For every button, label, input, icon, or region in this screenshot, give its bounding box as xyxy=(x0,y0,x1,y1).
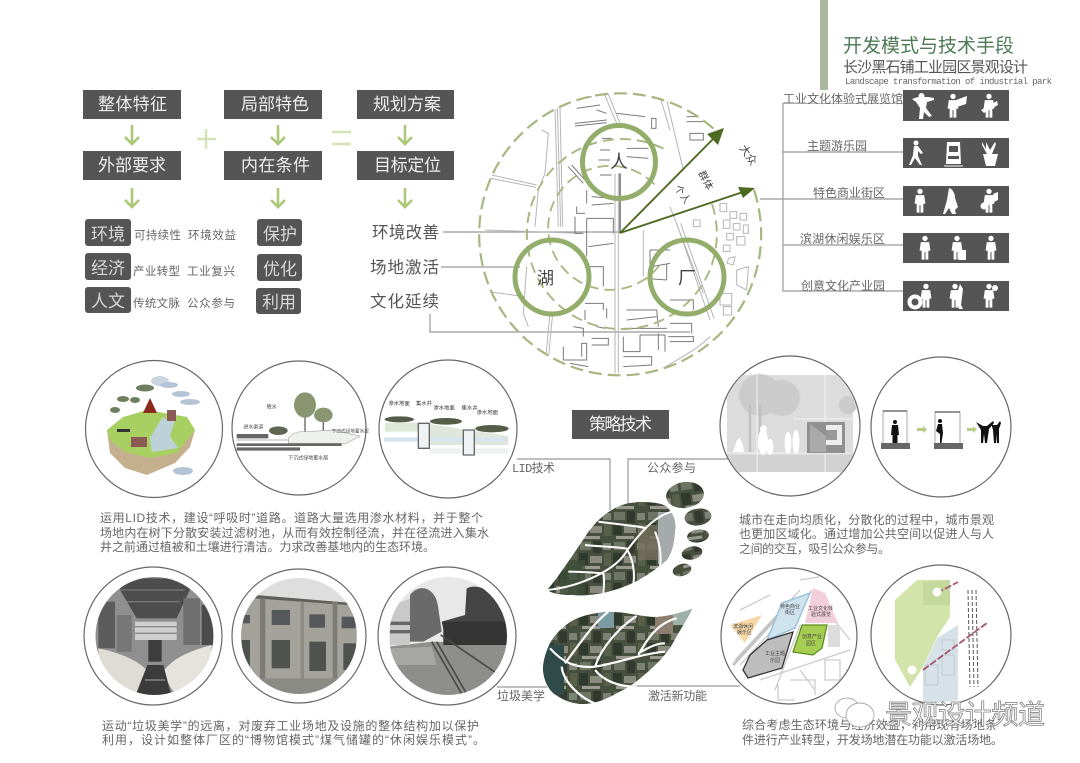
connector labels: 公众参与 xyxy=(647,460,696,475)
plus sign xyxy=(197,129,216,149)
flow column: plan: 规划方案 xyxy=(373,95,441,114)
strategy heading xyxy=(572,410,669,439)
body text: waste aesthetics: 利用，设计如整体厂区的“博物馆模式”煤气储罐的“休闲娱乐模式”。 xyxy=(102,732,485,747)
body text: public participation: 之间的交互，吸引公众参与。 xyxy=(739,541,890,556)
frame one xyxy=(881,411,910,449)
goals list: 文化延续 xyxy=(370,292,439,311)
condition tags xyxy=(256,219,302,314)
circle: activation plan xyxy=(871,565,1011,705)
cheering figures xyxy=(976,421,1001,443)
arrows xyxy=(620,128,755,233)
requirement tags: 产业转型 xyxy=(133,264,180,278)
flow column: overall xyxy=(83,90,181,207)
green top xyxy=(107,410,195,458)
flow column: plan: 目标定位 xyxy=(374,156,441,175)
labels: 集水井 xyxy=(416,399,433,407)
body text: LID: 井之前通过植被和土壤进行清洁。力求改善基地内的生态环境。 xyxy=(100,539,435,554)
circle: factory: 厂 xyxy=(678,268,696,288)
body text: LID xyxy=(100,510,489,554)
requirement tags: 公众参与 xyxy=(187,296,235,310)
requirement tags: 工业复兴 xyxy=(187,265,235,278)
wells xyxy=(418,423,474,455)
condition tags: 保护 xyxy=(263,225,297,244)
connector labels: LID技术 xyxy=(512,461,555,476)
flow column: overall: 整体特征 xyxy=(98,95,167,114)
zone labels: 娱乐区 xyxy=(737,629,752,636)
title block: 长沙黑石铺工业园区景观设计 xyxy=(843,59,1028,76)
circle: lake: 湖 xyxy=(537,269,554,288)
circle: LID eco island xyxy=(86,360,222,498)
foot-shaped leaf xyxy=(540,479,713,600)
lower leaf xyxy=(543,609,692,704)
requirement tags: 环境 xyxy=(91,225,125,244)
circle: permeable section xyxy=(379,360,517,498)
body text: public participation: 城市在走向均质化，分散化的过程中，城市景观 xyxy=(739,512,994,527)
annotations xyxy=(243,403,369,461)
labels xyxy=(388,399,499,416)
zone labels: 乐园 xyxy=(770,657,780,664)
zone labels: 工业文化体 xyxy=(808,605,833,612)
annotations: 进水渠道 xyxy=(243,423,263,430)
requirement tags: 可持续性 xyxy=(134,228,181,242)
body text: public participation: 也更加区域化。通过增加公共空间以促进人与人 xyxy=(739,527,994,541)
photo circle: plant interior xyxy=(84,567,222,705)
zone labels xyxy=(733,603,833,664)
zone labels: 创意产业 xyxy=(802,633,822,640)
labels: 渗水地面 xyxy=(433,403,455,411)
circle: road section xyxy=(232,361,369,495)
program labels: 特色商业街区 xyxy=(813,185,885,200)
trees xyxy=(269,392,333,435)
watermark: 景观设计频道 xyxy=(885,700,1045,730)
goals list: 环境改善 xyxy=(372,223,439,242)
circle: lake xyxy=(515,240,589,314)
photo circle: old building xyxy=(232,569,366,703)
green arrow two xyxy=(967,426,977,433)
brick blocks xyxy=(131,410,176,447)
body text: new functions: 综合考虑生态环境与经济效益，利用现有场地条 xyxy=(742,717,997,732)
goals list: 场地激活 xyxy=(370,258,439,277)
body text: new functions: 件进行产业转型，开发场地潜在功能以激活场地。 xyxy=(742,732,1003,747)
equals sign xyxy=(332,132,351,144)
circle: factory xyxy=(650,240,724,314)
annotations: 降水 xyxy=(267,403,277,410)
circle: interaction diagram xyxy=(871,357,1011,497)
circle: public space scene xyxy=(720,356,860,496)
body text: public participation xyxy=(739,512,994,556)
wechat bubbles xyxy=(835,698,874,727)
soil block xyxy=(107,430,195,475)
direction labels: 大众 xyxy=(737,142,761,168)
zone polygons xyxy=(767,593,810,640)
dashed rings xyxy=(479,93,761,375)
map linework xyxy=(485,92,748,373)
circle: people: 人 xyxy=(610,152,628,172)
body text: waste aesthetics xyxy=(102,718,485,747)
connector labels: 激活新功能 xyxy=(648,688,707,703)
annotations: 下沉式绿地蓄水层 xyxy=(288,454,328,461)
icon strip 3 xyxy=(903,186,1009,216)
frame two xyxy=(934,412,963,449)
title block: 开发模式与技术手段 xyxy=(843,35,1014,57)
zone labels: 街区 xyxy=(785,609,795,616)
flow column: local: 内在条件 xyxy=(241,156,310,175)
flow column: local xyxy=(224,90,322,207)
body text: LID: 运用LID技术，建设“呼吸时”道路。道路大量选用渗水材料，并于整个 xyxy=(100,510,483,525)
labels: 集水井 xyxy=(462,403,478,411)
body text: waste aesthetics: 运动“垃圾美学”的远离，对废弃工业场地及设施的整体结构加以保护 xyxy=(102,718,479,733)
toes xyxy=(664,479,713,578)
icon strip 1 xyxy=(903,90,1009,121)
vegetated layers xyxy=(384,416,509,454)
program labels: 主题游乐园 xyxy=(807,139,867,153)
labels: 渗水地面 xyxy=(477,408,499,416)
strategy connectors xyxy=(497,459,740,687)
direction labels xyxy=(672,142,761,206)
cabin xyxy=(143,398,157,413)
requirement tags xyxy=(85,219,236,313)
title block xyxy=(820,0,1052,92)
silhouettes xyxy=(733,426,800,455)
circle: zoning map xyxy=(721,568,857,704)
right tree connector xyxy=(760,103,903,291)
labels: 渗水地面 xyxy=(388,399,410,407)
annotations: 下凹式绿地蓄水层 xyxy=(332,428,369,435)
site map with circles xyxy=(479,92,761,375)
zone labels: 园区 xyxy=(806,641,816,647)
cloud and tags xyxy=(110,376,200,475)
condition tags: 优化 xyxy=(263,260,297,279)
connector labels xyxy=(497,460,707,703)
program labels xyxy=(783,90,903,293)
water xyxy=(150,418,178,452)
photo circle: rail tracks xyxy=(378,567,516,705)
section layers xyxy=(288,430,360,443)
requirement tags: 经济 xyxy=(91,259,125,278)
title block: Landscape transformation of industrial park xyxy=(845,77,1052,87)
zone labels: 验式展览 xyxy=(811,611,831,618)
icon strip 5 xyxy=(903,281,1009,311)
strategy heading: 策略技术 xyxy=(589,415,652,434)
flow column: local: 局部特色 xyxy=(241,95,309,114)
circle: people xyxy=(582,126,656,198)
zone labels: 特色商业 xyxy=(780,603,800,610)
program labels: 工业文化体验式展览馆 xyxy=(783,91,903,106)
direction labels: 群体 xyxy=(695,168,716,192)
goals list xyxy=(370,223,439,311)
connector lines from goals xyxy=(430,232,690,332)
program labels: 滨湖休闲娱乐区 xyxy=(800,231,885,246)
requirement tags: 人文 xyxy=(91,292,125,311)
zone labels: 滨湖休闲 xyxy=(733,623,753,630)
direction labels: 个人 xyxy=(672,183,693,206)
body text: new functions xyxy=(742,717,1003,747)
zone labels: 工业主题 xyxy=(765,650,785,657)
flow column: plan xyxy=(357,90,454,207)
connector labels: 垃圾美学 xyxy=(497,688,545,703)
icon strip 4 xyxy=(903,233,1009,263)
flow column: overall: 外部要求 xyxy=(98,156,166,175)
icon strip 2 xyxy=(903,138,1009,168)
green arrow one xyxy=(917,426,927,433)
condition tags: 利用 xyxy=(262,293,296,312)
program labels: 创意文化产业园 xyxy=(801,278,885,293)
body text: LID: 场地内在树下分散安装过滤树池，从而有效控制径流，并在径流进入集水 xyxy=(100,525,489,540)
requirement tags: 环境效益 xyxy=(188,228,236,242)
requirement tags: 传统文脉 xyxy=(133,296,180,310)
